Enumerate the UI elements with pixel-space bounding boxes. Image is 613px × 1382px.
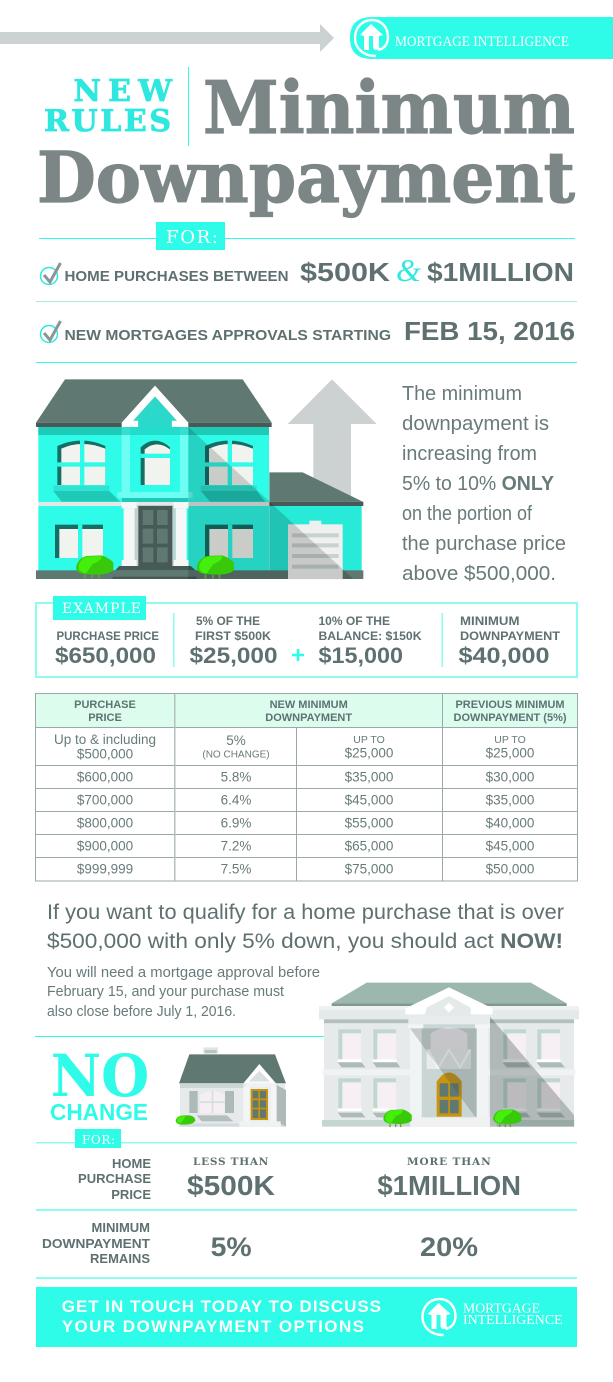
text block: explanation: The minimum [402, 383, 522, 405]
text: call to action [62, 1297, 381, 1336]
text block: explanation: above $500,000. [402, 563, 556, 585]
value: less than: LESS THAN [193, 1156, 269, 1168]
illustration: teal house with rising arrow [36, 379, 377, 579]
example: minimum downpayment: DOWNPAYMENT [460, 629, 561, 643]
cast shadow [490, 1017, 574, 1127]
table rows: $999,999 [77, 862, 133, 877]
value: less than [187, 1156, 275, 1201]
row label: home purchase price: HOME [112, 1156, 151, 1171]
table rows: $40,000 [486, 816, 534, 831]
example: ten percent: 10% OF THE [318, 614, 390, 628]
icon: logo mark [355, 20, 388, 56]
row label: home purchase price [78, 1156, 151, 1202]
illustration: small house [176, 1047, 286, 1127]
row label: home purchase price: PRICE [111, 1187, 151, 1202]
text block: approval deadline [47, 965, 320, 1020]
text block: approval deadline: also close before July 1, 2016. [47, 1004, 236, 1020]
example: minimum downpayment: $40,000 [458, 643, 550, 668]
windows [57, 440, 105, 485]
garage [269, 506, 362, 571]
heading: no change: CHANGE [50, 1099, 148, 1125]
plus sign [292, 649, 304, 661]
example: five percent: 5% OF THE [196, 614, 260, 628]
comparison section [36, 1129, 577, 1279]
text block: explanation: the purchase price [402, 533, 566, 555]
table rows: $55,000 [345, 816, 393, 831]
heading: act now: If you want to qualify for a home purchase that is over [47, 900, 564, 924]
value: more than: MORE THAN [407, 1156, 491, 1168]
logo wordmark: MORTGAGE [463, 1302, 540, 1317]
table rows: $30,000 [486, 770, 534, 785]
tag: example [53, 596, 146, 620]
example: ten percent: BALANCE: $150K [318, 629, 422, 643]
table header: PREVIOUS MINIMUM [456, 699, 564, 711]
heading: act now [47, 900, 564, 953]
text block: explanation: 5% to 10% ONLY [402, 473, 555, 495]
example: five percent [190, 614, 278, 668]
example: ten percent: $15,000 [318, 643, 403, 668]
example: minimum downpayment [458, 614, 561, 668]
table rows: $25,000 [345, 746, 393, 761]
table rows: $35,000 [486, 793, 534, 808]
arrow: top grey pointer [0, 24, 334, 52]
door and columns [135, 505, 175, 567]
table rows: 7.5% [221, 862, 251, 877]
heading: downpayment: Downpayment [37, 136, 575, 219]
text: home purchases between: HOME PURCHASES BETWEEN [64, 268, 288, 285]
example: purchase price [55, 629, 159, 668]
logo wordmark [463, 1302, 563, 1328]
call to action banner [36, 1287, 577, 1347]
table rows: $75,000 [345, 862, 393, 877]
heading: act now: $500,000 with only 5% down, you should act NOW! [47, 929, 563, 953]
kicker: new rules: RULES [44, 104, 171, 139]
table rows [54, 732, 534, 877]
heading: minimum: Minimum [203, 65, 575, 150]
table rows: $700,000 [77, 793, 133, 808]
value: price range: $500K [300, 257, 390, 287]
icon: check two [40, 321, 60, 342]
row label: minimum downpayment remains: MINIMUM [92, 1220, 150, 1235]
value: twenty percent: 20% [420, 1232, 478, 1262]
table rows: $45,000 [486, 839, 534, 854]
value: more than [377, 1156, 521, 1201]
tag: for: FOR: [82, 1133, 115, 1147]
title block [37, 65, 575, 219]
table rows: $50,000 [486, 862, 534, 877]
table rows: $45,000 [345, 793, 393, 808]
heading: no change: NO [51, 1042, 149, 1110]
tag: for [75, 1129, 121, 1148]
table rows: $25,000 [486, 746, 534, 761]
table rows: $500,000 [77, 747, 133, 762]
table: minimum downpayment by price [36, 694, 578, 881]
table rows: $800,000 [77, 816, 133, 831]
row label: minimum downpayment remains: REMAINS [90, 1251, 150, 1266]
table rows: $600,000 [77, 770, 133, 785]
value: price range [300, 252, 574, 288]
table header: NEW MINIMUM [270, 699, 348, 711]
table rows: (NO CHANGE) [202, 750, 270, 761]
table rows: $35,000 [345, 770, 393, 785]
table rows: $900,000 [77, 839, 133, 854]
table rows: 6.4% [221, 793, 251, 808]
table rows: Up to & including [54, 732, 156, 747]
table rows: UP TO [494, 734, 526, 746]
example: minimum downpayment: MINIMUM [460, 614, 520, 628]
tag: example: EXAMPLE [62, 601, 141, 617]
example: purchase price: PURCHASE PRICE [56, 629, 159, 643]
portico [422, 1023, 477, 1118]
illustration: mansion [319, 983, 579, 1127]
value: more than: $1MILLION [377, 1170, 521, 1201]
table rows: UP TO [353, 734, 385, 746]
row label: home purchase price: PURCHASE [78, 1171, 151, 1186]
value: price range: & [396, 252, 421, 288]
row label: minimum downpayment remains: DOWNPAYMENT [42, 1236, 150, 1251]
table rows: 7.2% [221, 839, 251, 854]
table header [74, 699, 567, 724]
value: date: FEB 15, 2016 [404, 316, 575, 346]
table header: PURCHASE [74, 699, 136, 711]
kicker: new rules [44, 74, 173, 139]
text block: explanation: on the portion of [402, 503, 532, 525]
example: five percent: FIRST $500K [195, 629, 271, 643]
example: ten percent [318, 614, 422, 668]
logo banner: top [350, 17, 613, 59]
logo wordmark: INTELLIGENCE [463, 1313, 563, 1328]
example: purchase price: $650,000 [55, 643, 156, 668]
table rows: 5.8% [221, 770, 251, 785]
cast shadow [188, 427, 353, 579]
icon: logo mark [422, 1299, 456, 1335]
table rows: 5% [226, 733, 246, 748]
text block: explanation: downpayment is [402, 413, 549, 435]
example: five percent: $25,000 [190, 643, 278, 668]
text: new mortgages approvals starting: NEW MORTGAGES APPROVALS STARTING [64, 327, 391, 344]
text block: explanation: increasing from [402, 443, 537, 465]
criteria section [36, 222, 577, 363]
row label: minimum downpayment remains [42, 1220, 150, 1266]
text: call to action: YOUR DOWNPAYMENT OPTIONS [62, 1317, 364, 1336]
table header: PRICE [88, 712, 122, 724]
kicker: new rules: NEW [74, 74, 173, 109]
base [36, 570, 363, 579]
text block: approval deadline: You will need a mortgage approval before [47, 965, 320, 981]
table rows: 6.9% [221, 816, 251, 831]
text block: approval deadline: February 15, and your purchase must [47, 984, 284, 1000]
value: price range: $1MILLION [427, 257, 574, 287]
table header: DOWNPAYMENT [265, 712, 352, 724]
tag: for: FOR: [166, 227, 218, 248]
text block: explanation [402, 383, 566, 585]
table header: DOWNPAYMENT (5%) [454, 712, 567, 724]
text: call to action: GET IN TOUCH TODAY TO DISCUSS [62, 1297, 381, 1316]
tag: for [156, 222, 225, 250]
value: five percent: 5% [211, 1232, 252, 1262]
value: less than: $500K [187, 1170, 275, 1201]
table rows: $65,000 [345, 839, 393, 854]
panel: example [36, 596, 577, 677]
icon: check one [40, 263, 60, 284]
logo wordmark: MORTGAGE INTELLIGENCE [395, 34, 569, 50]
